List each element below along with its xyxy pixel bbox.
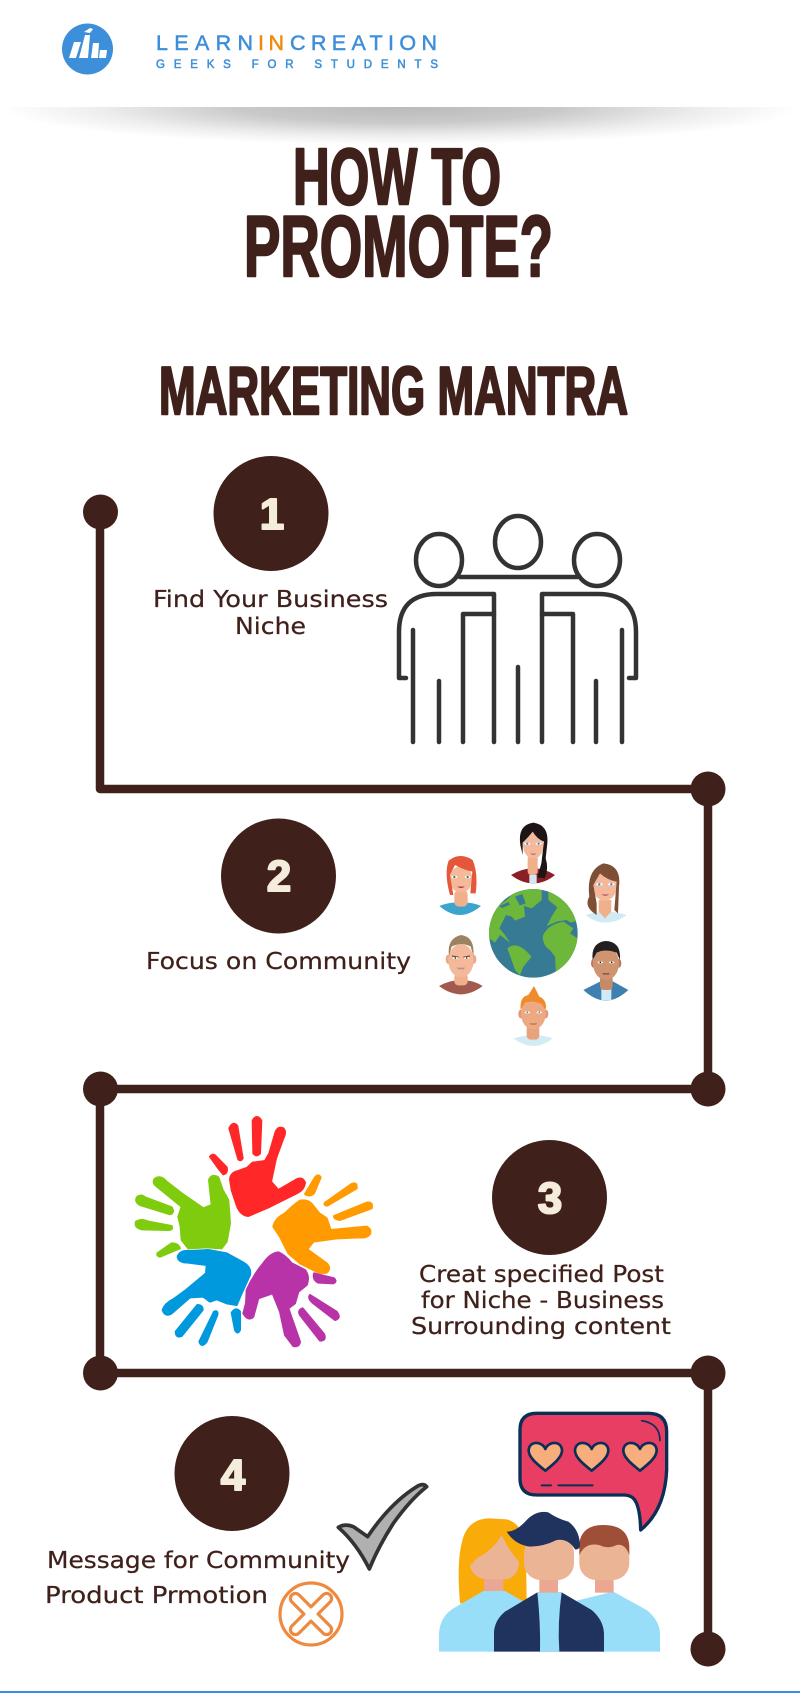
step 2 badge: 2 — [267, 852, 291, 901]
step 4 text: Product Prmotion — [45, 1581, 268, 1609]
icon: orange cross in circle — [273, 1576, 349, 1652]
logo wordmark: CREATION — [290, 31, 437, 55]
hand: green — [136, 1176, 230, 1257]
step 3 text: Surrounding content — [411, 1312, 671, 1340]
icon: check mark — [338, 1485, 427, 1569]
step 1 badge — [214, 456, 328, 571]
title: PROMOTE? — [244, 199, 553, 295]
face: man with orange hair — [513, 986, 553, 1046]
step 3 text: Creat specified Post — [419, 1260, 664, 1288]
face: woman with red hair — [439, 856, 481, 915]
logo wordmark — [156, 31, 437, 55]
person: man in navy jacket — [494, 1512, 604, 1652]
step 1 text: Niche — [235, 612, 306, 640]
step 4 badge — [174, 1416, 290, 1531]
step 4 text — [45, 1546, 350, 1609]
icon: logo circle with bars — [62, 24, 113, 74]
connector path — [83, 494, 726, 1666]
icon: three people line art — [399, 516, 636, 742]
speech bubble with hearts — [520, 1413, 667, 1530]
step 3 text — [411, 1260, 671, 1340]
step 2 text: Focus on Community — [146, 947, 411, 975]
person: man with brown hair — [567, 1525, 660, 1652]
step 3 text: for Niche - Business — [421, 1286, 664, 1314]
step 4 badge: 4 — [221, 1451, 246, 1500]
logo tagline: GEEKS FOR STUDENTS — [156, 59, 438, 71]
illustration: people with speech bubble and check mark — [338, 1413, 667, 1652]
title — [244, 132, 553, 295]
step 2 badge — [221, 818, 336, 934]
face: woman with brown hair — [586, 863, 627, 923]
hand: orange — [273, 1175, 372, 1273]
face: man with sandy hair — [439, 935, 483, 994]
step 3 badge: 3 — [538, 1174, 562, 1223]
step 1 badge: 1 — [260, 490, 284, 539]
hand: blue — [163, 1250, 250, 1345]
step 1 text: Find Your Business — [153, 585, 388, 613]
hand: purple — [243, 1252, 339, 1346]
header logo — [62, 24, 438, 74]
face: woman with black hair — [511, 823, 555, 883]
hand: red — [210, 1117, 305, 1216]
logo wordmark: IN — [258, 31, 284, 55]
step 1 text — [153, 585, 388, 640]
bottom border line — [0, 1691, 800, 1693]
illustration: five coloured hands — [136, 1117, 372, 1346]
step 4 text: Message for Community — [47, 1546, 350, 1574]
step 3 badge — [492, 1140, 607, 1255]
illustration: globe with community faces — [439, 823, 628, 1046]
face: man with dark hair — [583, 941, 628, 1001]
header shadow — [45, 107, 756, 140]
title: HOW TO — [293, 132, 501, 221]
person: woman with yellow hair — [439, 1518, 527, 1652]
globe — [487, 887, 580, 978]
logo wordmark: LEARN — [156, 31, 253, 55]
